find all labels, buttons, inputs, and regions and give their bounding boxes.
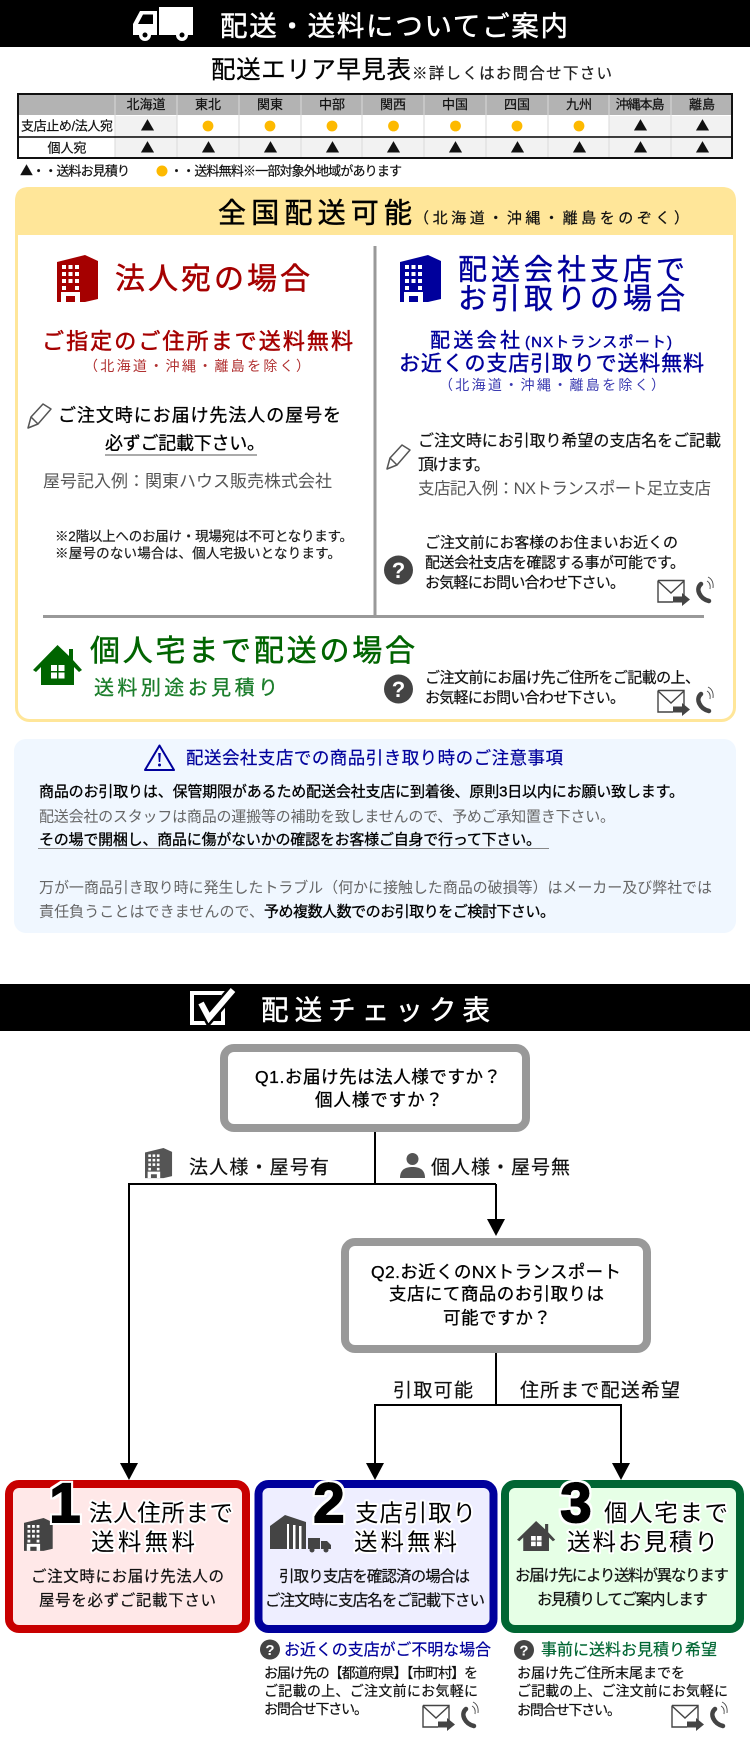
sub-panel: corporate address: 屋号記入例：関東ハウス販売株式会社	[43, 472, 332, 491]
table: delivery area: ▲	[510, 138, 524, 158]
question 2: Q2.お近くのNXトランスポート	[371, 1262, 621, 1282]
card title: 送料お見積り	[567, 1529, 718, 1555]
heading: delivery area table: 配送エリア早見表	[211, 56, 411, 84]
panel: pickup notes	[14, 739, 736, 933]
icon: warehouse and truck	[270, 1515, 331, 1552]
table: delivery area: 東北	[195, 97, 221, 112]
sub-panel: branch pickup: 支店記入例：NXトランスポート足立支店	[418, 479, 711, 498]
notes body: 商品のお引取りは、保管期限があるため配送会社支店に到着後、原則3日以内にお願い致します。	[39, 782, 684, 800]
sub-panel: branch pickup	[384, 254, 721, 606]
card body: お届け先により送料が異なります	[515, 1566, 729, 1584]
notes body	[38, 782, 712, 920]
table: delivery area: 中国	[442, 97, 468, 112]
note: ご注文時にお引取り希望の支店名をご記載	[418, 432, 721, 450]
sub-panel: corporate address: （北海道・沖縄・離島を除く）	[84, 358, 310, 374]
table: delivery area: 沖縄本島	[616, 97, 664, 112]
table: delivery area: 支店止め/法人宛	[21, 118, 113, 134]
icon: warning triangle	[145, 746, 174, 770]
sub-panel: corporate address: ※屋号のない場合は、個人宅扱いとなります。	[55, 546, 341, 561]
number: 2	[313, 1471, 345, 1534]
heading: delivery area table: ※詳しくはお問合せ下さい	[412, 64, 612, 82]
branch label: pickup: 引取可能	[393, 1380, 473, 1402]
panel: nationwide delivery	[15, 187, 736, 720]
branch label: individual: 個人様・屋号無	[431, 1156, 570, 1178]
question 2: 支店にて商品のお引取りは	[389, 1284, 604, 1304]
icon: question: ?	[392, 558, 405, 583]
note: branch unknown: お問合せ下さい。	[264, 1701, 368, 1717]
inquiry text: お気軽にお問い合わせ下さい。	[425, 574, 625, 592]
note: estimate request: ご記載の上、ご注文前にお気軽に	[517, 1683, 728, 1699]
card body: お見積りしてご案内します	[537, 1590, 708, 1608]
card title	[567, 1500, 728, 1555]
inquiry text: お気軽にお問い合わせ下さい。	[425, 690, 625, 706]
table: delivery area: ▲	[448, 138, 462, 158]
question 2	[345, 1242, 647, 1349]
icon: green house	[33, 645, 82, 685]
table: delivery area: 四国	[504, 97, 530, 112]
card title: 個人宅まで	[604, 1500, 728, 1526]
icon: mail and phone	[658, 687, 713, 716]
header title: 配送チェック表	[261, 994, 490, 1026]
legend: ▲・・送料お見積り	[20, 160, 130, 180]
table: delivery area: ▲	[140, 138, 154, 158]
table: delivery area: ▲	[140, 116, 154, 136]
card body	[31, 1568, 224, 1610]
note: estimate request: 事前に送料お見積り希望	[541, 1641, 717, 1659]
result card 3	[505, 1471, 740, 1629]
note: estimate request: お届け先ご住所末尾までを	[517, 1665, 685, 1681]
table: delivery area: 関東	[257, 97, 283, 112]
heading: 個人宅まで配送の場合	[90, 635, 415, 668]
note: branch unknown: ご記載の上、ご注文前にお気軽に	[264, 1683, 478, 1699]
table: delivery area: 九州	[566, 97, 592, 112]
branch label: individual	[400, 1153, 570, 1178]
table: delivery area	[18, 94, 732, 158]
card body	[515, 1566, 729, 1608]
card body: ご注文時に支店名をご記載下さい	[265, 1592, 485, 1610]
note: branch unknown: お近くの支店がご不明な場合	[284, 1641, 491, 1659]
icon: check box	[192, 990, 233, 1023]
table: delivery area: ▲	[202, 138, 216, 158]
sub-panel: branch pickup: （北海道・沖縄・離島を除く）	[439, 377, 665, 393]
card title: 送料無料	[354, 1529, 457, 1555]
inquiry text: ご注文前にお届け先ご住所をご記載の上、	[425, 670, 700, 686]
legend	[20, 160, 402, 180]
notes body: 予め複数人数でのお引取りをご検討下さい。	[264, 904, 555, 920]
icon: blue building	[400, 255, 441, 302]
result card 2	[258, 1471, 494, 1629]
card body: 屋号を必ずご記載下さい	[39, 1592, 216, 1610]
icon: question: ?	[265, 1642, 275, 1659]
note: estimate request	[514, 1640, 728, 1731]
table: delivery area: 北海道	[126, 97, 166, 112]
table: delivery area: 離島	[689, 97, 715, 112]
table: delivery area: 個人宛	[47, 140, 87, 156]
branch label: corporate	[145, 1148, 329, 1178]
table: delivery area: ▲	[326, 138, 340, 158]
table: delivery area: ▲	[696, 116, 710, 136]
icon: question	[384, 556, 413, 584]
heading: 法人宛の場合	[115, 263, 310, 296]
legend: ・・送料無料※一部対象外地域があります	[170, 164, 402, 178]
note: estimate request: お問合せ下さい。	[517, 1702, 621, 1718]
notes heading: 配送会社支店での商品引き取り時のご注意事項	[186, 748, 564, 768]
inquiry text: ご注文前にお客様のお住まいお近くの	[425, 534, 678, 552]
icon: mail and phone	[658, 577, 713, 606]
icon: question: ?	[392, 677, 405, 702]
sub-panel: home delivery: 送料別途お見積り	[94, 676, 278, 700]
card title: 支店引取り	[355, 1500, 476, 1526]
icon: question	[260, 1640, 280, 1660]
table: delivery area: ▲	[634, 116, 648, 136]
icon: house	[517, 1521, 555, 1551]
icon: mail and phone	[423, 1702, 478, 1731]
heading	[458, 254, 685, 316]
card title: 法人住所まで	[89, 1500, 233, 1526]
icon: mail and phone	[672, 1702, 727, 1731]
inquiry text	[425, 534, 685, 592]
note: branch unknown	[260, 1640, 491, 1731]
sub-panel: corporate address: ご指定のご住所まで送料無料	[42, 329, 353, 354]
icon: building	[24, 1518, 53, 1551]
table: delivery area: ▲	[264, 138, 278, 158]
table: delivery area: ▲	[696, 138, 710, 158]
icon: pencil	[28, 404, 51, 428]
sub-panel: branch pickup: 配送会社	[430, 329, 520, 352]
question 1: Q1.お届け先は法人様ですか？	[255, 1067, 501, 1087]
sub-panel: corporate address: ※2階以上へのお届け・現場宛は不可となります。	[55, 529, 353, 544]
sub-panel: branch pickup: 頂けます。	[418, 456, 490, 474]
number: 1	[49, 1471, 81, 1534]
table: delivery area: ▲	[634, 138, 648, 158]
card body: ご注文時にお届け先法人の	[31, 1568, 224, 1586]
notes body: 責任負うことはできませんので、	[39, 904, 264, 920]
table: delivery area: ▲	[572, 138, 586, 158]
sub-panel: corporate address	[28, 255, 353, 561]
table: delivery area: 関西	[380, 97, 406, 112]
header: shipping guide	[0, 0, 750, 47]
heading: 配送会社支店で	[458, 254, 685, 286]
question 2: 可能ですか？	[443, 1308, 551, 1328]
branch label: corporate: 法人様・屋号有	[189, 1156, 329, 1178]
notes body: 配送会社のスタッフは商品の運搬等の補助を致しませんので、予めご承知置き下さい。	[39, 808, 615, 826]
header title: 配送・送料についてご案内	[220, 10, 568, 42]
panel title: 全国配送可能	[218, 198, 412, 228]
table: delivery area: 中部	[319, 97, 345, 112]
sub-panel: branch pickup: (NXトランスポート)	[525, 334, 672, 351]
sub-panel: corporate address: 必ずご記載下さい。	[105, 434, 265, 454]
heading: お引取りの場合	[458, 282, 685, 316]
icon: question	[384, 674, 413, 704]
card body: 引取り支店を確認済の場合は	[279, 1568, 470, 1586]
sub-panel: branch pickup: お近くの支店引取りで送料無料	[399, 352, 704, 376]
branch label: home delivery: 住所まで配送希望	[520, 1380, 680, 1402]
card title	[354, 1500, 476, 1555]
inquiry text: 配送会社支店を確認する事が可能です。	[425, 554, 685, 572]
number: 3	[560, 1471, 592, 1534]
sub-panel: home delivery	[33, 635, 713, 716]
header: delivery check chart	[0, 984, 750, 1031]
heading: delivery area table	[211, 56, 612, 84]
icon: truck	[133, 7, 193, 41]
table: delivery area: ▲	[386, 138, 400, 158]
icon: red building	[57, 255, 98, 302]
card title: 送料無料	[91, 1529, 195, 1555]
panel title note: （北海道・沖縄・離島をのぞく）	[414, 210, 689, 227]
result card 1	[9, 1471, 246, 1629]
inquiry text	[425, 670, 700, 706]
notes body: 万が一商品引き取り時に発生したトラブル（何かに接触した商品の破損等）はメーカー及び弊社では	[39, 878, 712, 896]
icon: question: ?	[519, 1642, 529, 1660]
question 1	[224, 1048, 526, 1128]
arrows	[120, 1219, 630, 1480]
icon: question	[514, 1640, 534, 1660]
card body	[265, 1568, 485, 1610]
note: branch unknown: お届け先の【都道府県】【市町村】を	[264, 1665, 478, 1681]
question 1: 個人様ですか？	[315, 1090, 443, 1110]
note: ご注文時にお届け先法人の屋号を	[58, 406, 341, 426]
flowchart connectors	[129, 1132, 621, 1465]
notes body: その場で開梱し、商品に傷がないかの確認をお客様ご自身で行って下さい。	[39, 832, 541, 848]
card title	[89, 1500, 233, 1555]
icon: pencil	[387, 445, 410, 469]
